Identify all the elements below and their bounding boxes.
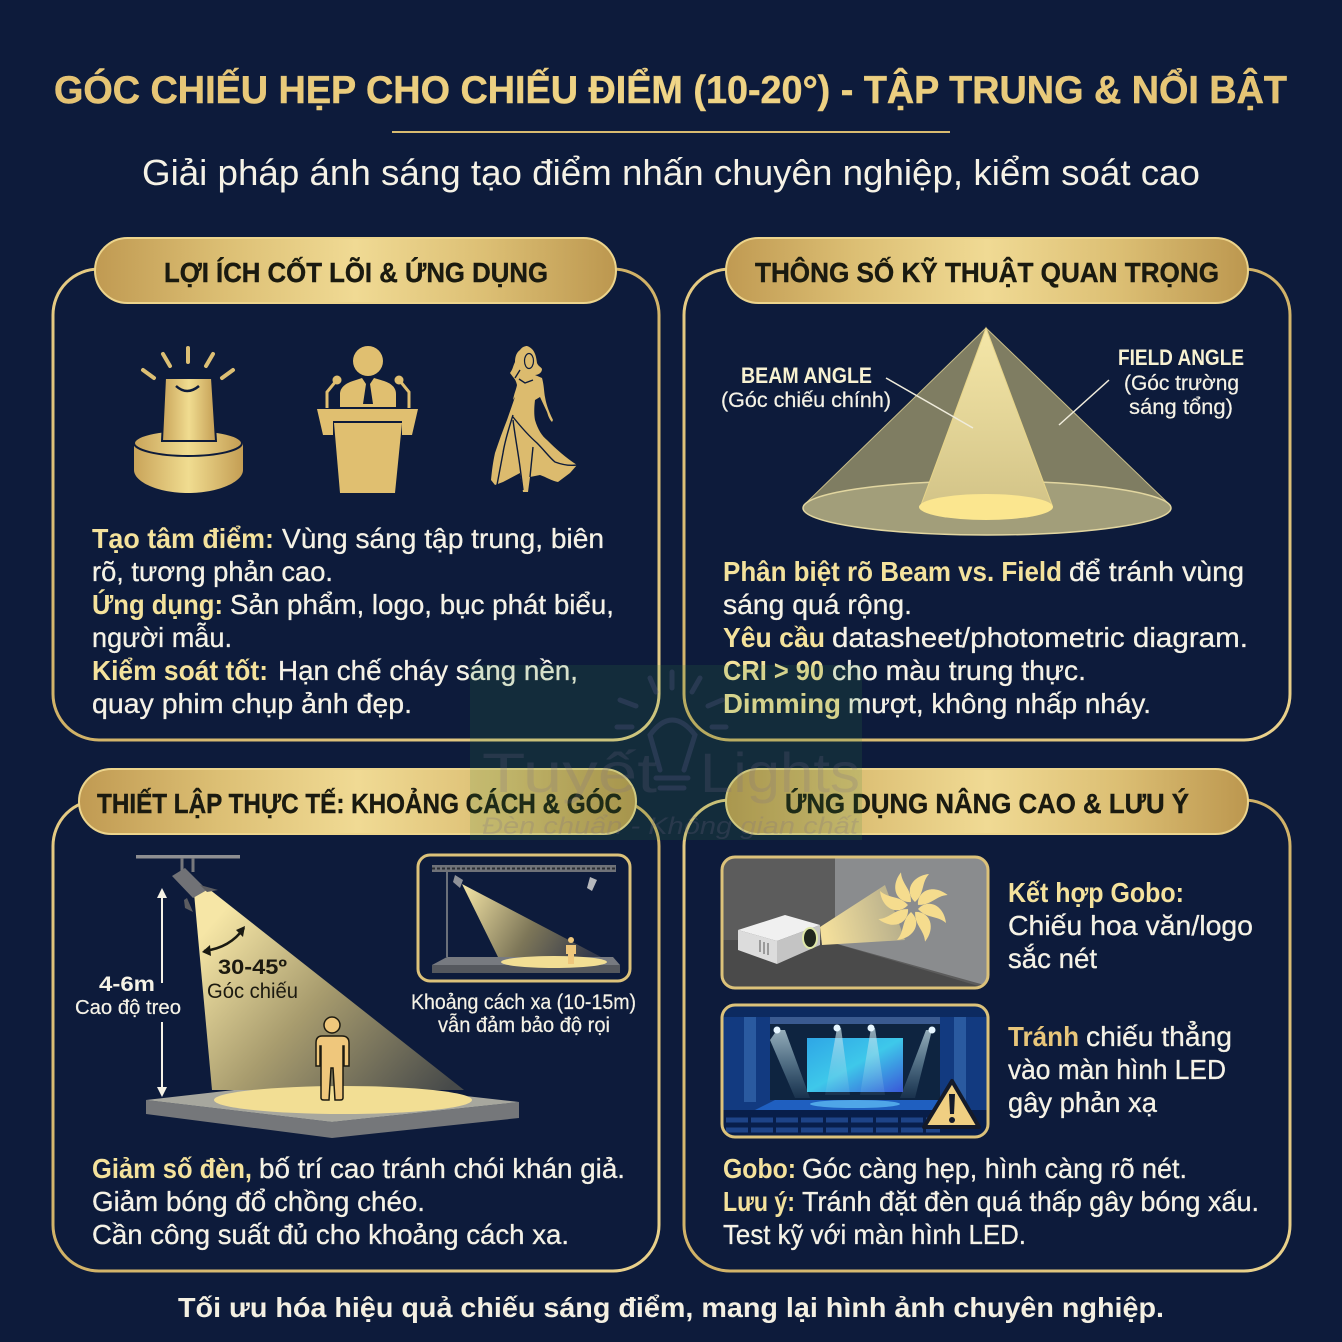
- watermark: [470, 665, 862, 840]
- text block: core benefits: quay phim chụp ảnh đẹp.: [92, 688, 412, 719]
- text block: LED warning: Tránh: [1008, 1021, 1079, 1052]
- caption: long throw: Khoảng cách xa (10-15m): [411, 991, 636, 1014]
- caption: long throw: [411, 991, 636, 1037]
- text block: LED warning: chiếu thẳng: [1086, 1020, 1232, 1052]
- text block: advanced notes: Gobo:: [723, 1153, 796, 1184]
- text block: advanced notes: Tránh đặt đèn quá thấp gây bóng xấu.: [802, 1186, 1259, 1217]
- text block: technical specifications: Phân biệt rõ Beam vs. Field: [723, 556, 1062, 587]
- arrow: hanging height: 4-6m: [99, 973, 155, 996]
- title: GÓC CHIẾU HẸP CHO CHIẾU ĐIỂM (10-20°) - TẬP TRUNG & NỔI BẬT: [54, 67, 1287, 112]
- text block: technical specifications: để tránh vùng: [1069, 556, 1244, 587]
- label: beam angle: BEAM ANGLE: [741, 363, 872, 388]
- text block: gobo: [1008, 877, 1253, 974]
- text block: advanced notes: Lưu ý:: [723, 1186, 795, 1217]
- text block: advanced notes: [723, 1153, 1259, 1250]
- illustration: LED stage warning: [722, 1005, 988, 1137]
- text block: technical specifications: datasheet/photometric diagram.: [832, 622, 1248, 653]
- icon: projector: [738, 915, 820, 964]
- footer statement: Tối ưu hóa hiệu quả chiếu sáng điểm, mang lại hình ảnh chuyên nghiệp.: [178, 1292, 1164, 1323]
- heading pill: advanced applications: [726, 769, 1248, 834]
- text block: technical specifications: [723, 556, 1248, 719]
- text block: LED warning: gây phản xạ: [1008, 1087, 1157, 1118]
- panel: technical specifications: [684, 238, 1290, 740]
- text block: core benefits: Ứng dụng:: [92, 589, 223, 620]
- text block: technical specifications: mượt, không nhấp nháy.: [848, 688, 1151, 719]
- icon: product on pedestal: [134, 348, 243, 493]
- text block: LED warning: [1008, 1020, 1232, 1118]
- caption: long throw: vẫn đảm bảo độ rọi: [438, 1014, 610, 1037]
- icon: warning triangle: [924, 1081, 979, 1127]
- heading pill: practical setup: THIẾT LẬP THỰC TẾ: KHOẢNG CÁCH & GÓC: [97, 787, 622, 819]
- watermark: Lights: [700, 741, 860, 804]
- text block: technical specifications: Dimming: [723, 688, 841, 719]
- text block: technical specifications: Yêu cầu: [723, 622, 825, 653]
- diagram: beam and field angle cone: [721, 328, 1244, 535]
- text block: core benefits: rõ, tương phản cao.: [92, 556, 333, 587]
- text block: core benefits: Sản phẩm, logo, bục phát biểu,: [230, 589, 614, 620]
- text block: core benefits: Kiểm soát tốt:: [92, 655, 268, 686]
- text block: advanced notes: Test kỹ với màn hình LED.: [723, 1219, 1026, 1250]
- text block: core benefits: Tạo tâm điểm:: [92, 523, 274, 554]
- icon: person: [316, 1017, 349, 1100]
- text block: gobo: Kết hợp Gobo:: [1008, 877, 1184, 908]
- inset: long throw stage: [418, 855, 630, 981]
- text block: technical specifications: sáng quá rộng.: [723, 589, 912, 620]
- heading pill: advanced applications: ỨNG DỤNG NÂNG CAO & LƯU Ý: [785, 788, 1189, 819]
- text block: technical specifications: cho màu trung thực.: [832, 655, 1086, 686]
- arrow: hanging height: [75, 888, 181, 1097]
- text block: practical setup: Giảm bóng đổ chồng chéo.: [92, 1186, 425, 1217]
- label: field angle: (Góc trường: [1124, 372, 1239, 395]
- label: beam angle: [721, 363, 891, 412]
- label: beam angle: (Góc chiếu chính): [721, 389, 891, 412]
- track light: [136, 855, 240, 912]
- text block: core benefits: [92, 523, 614, 719]
- arrow: hanging height: Cao độ treo: [75, 997, 181, 1019]
- text block: gobo: sắc nét: [1008, 943, 1097, 974]
- diagram: stage lighting setup: [75, 855, 519, 1138]
- text block: practical setup: [92, 1153, 625, 1250]
- label: field angle: sáng tổng): [1129, 396, 1233, 419]
- label: beam angle value: 30-45º: [218, 956, 287, 979]
- text block: core benefits: người mẫu.: [92, 622, 232, 653]
- icon: woman in gown: [491, 346, 577, 492]
- text block: gobo: Chiếu hoa văn/logo: [1008, 910, 1253, 941]
- icon: speaker at podium: [317, 346, 418, 493]
- heading pill: practical setup: [79, 769, 636, 834]
- heading pill: technical specifications: THÔNG SỐ KỸ THUẬT QUAN TRỌNG: [755, 256, 1219, 288]
- watermark: Đèn chuẩn - Không gian chất: [482, 813, 860, 840]
- text block: practical setup: bố trí cao tránh chói khán giả.: [259, 1153, 625, 1184]
- text block: technical specifications: CRI > 90: [723, 655, 824, 686]
- text block: LED warning: vào màn hình LED: [1008, 1054, 1226, 1085]
- text block: advanced notes: Góc càng hẹp, hình càng rõ nét.: [802, 1153, 1187, 1184]
- heading pill: core benefits: [95, 238, 616, 303]
- text block: core benefits: Vùng sáng tập trung, biên: [282, 523, 604, 554]
- label: field angle: [1118, 345, 1244, 419]
- arrow: beam angle arc: [202, 926, 245, 956]
- label: beam angle value: [207, 956, 298, 1003]
- label: field angle: FIELD ANGLE: [1118, 345, 1244, 370]
- label: beam angle value: Góc chiếu: [207, 980, 298, 1003]
- heading pill: technical specifications: [726, 238, 1248, 303]
- text block: core benefits: Hạn chế cháy sáng nền,: [278, 655, 578, 686]
- panel: practical setup: [53, 769, 659, 1271]
- text block: practical setup: Cần công suất đủ cho khoảng cách xa.: [92, 1219, 569, 1250]
- text block: practical setup: Giảm số đèn,: [92, 1153, 252, 1184]
- watermark: Tuyết: [482, 741, 658, 804]
- heading pill: core benefits: LỢI ÍCH CỐT LÕI & ỨNG DỤNG: [164, 256, 548, 288]
- panel: core benefits and applications: [53, 238, 659, 740]
- illustration: gobo projector: [722, 857, 988, 988]
- subtitle: Giải pháp ánh sáng tạo điểm nhấn chuyên nghiệp, kiểm soát cao: [142, 152, 1200, 193]
- panel: advanced applications: [684, 769, 1290, 1271]
